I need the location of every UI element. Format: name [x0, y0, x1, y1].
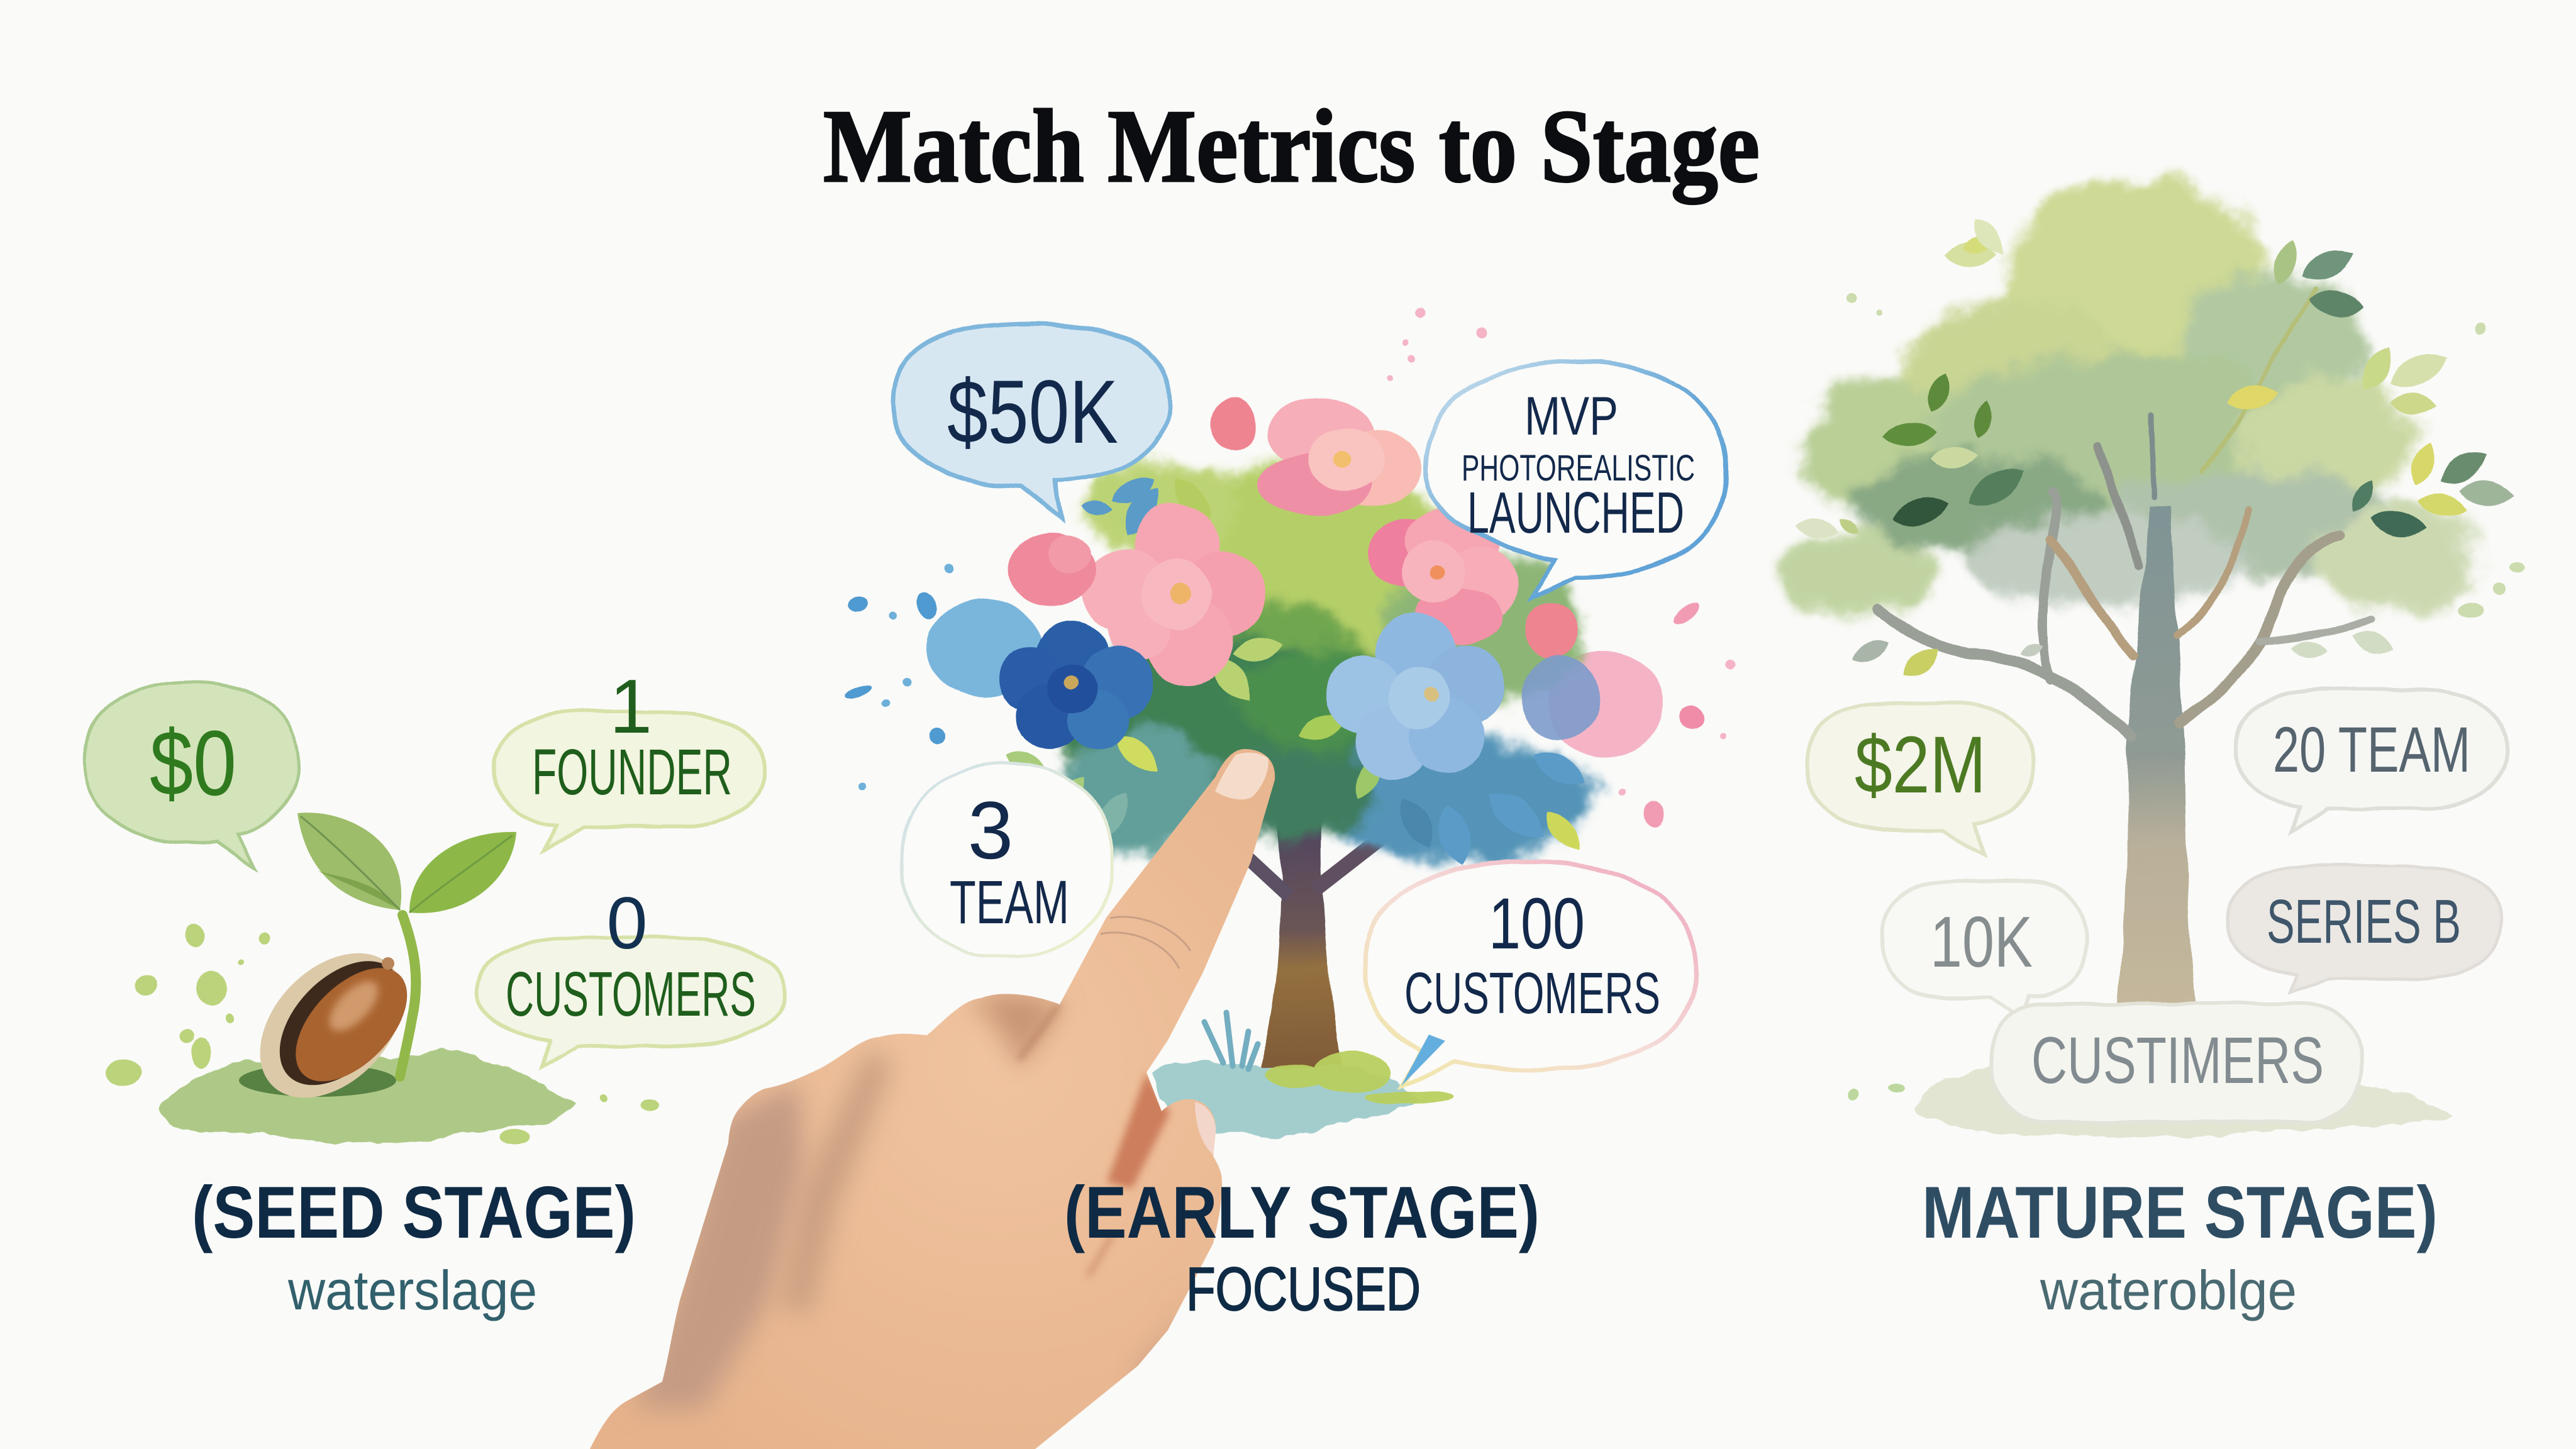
- bubble: 0 customers: CUSTOMERS: [506, 959, 756, 1030]
- ground wash: [1915, 1066, 2453, 1138]
- bubble: MVP launched: LAUNCHED: [1467, 480, 1684, 545]
- paint dots: [1846, 293, 2524, 1100]
- bubble: 20 team: 20 TEAM: [2273, 714, 2470, 786]
- crown foliage: [1057, 462, 1597, 862]
- seed stage caption: waterslage: [287, 1259, 537, 1321]
- blue leaves: [1080, 470, 1590, 870]
- paint splatter: [106, 924, 660, 1145]
- light blue flower: [1326, 613, 1506, 780]
- bubble: $50K: [893, 323, 1170, 519]
- bubble: 3 team: TEAM: [950, 868, 1069, 936]
- stem: [400, 915, 416, 1077]
- ground wash: [159, 1047, 575, 1145]
- panel: seed stage: [84, 663, 785, 1321]
- leaves: [1794, 214, 2516, 684]
- dark blue flower: [1000, 621, 1153, 750]
- thumbnail: [1195, 1102, 1216, 1155]
- icon: pointing hand: [590, 749, 1275, 1449]
- ground wash: [1152, 1062, 1419, 1136]
- bubble: 1 founder: [494, 663, 765, 850]
- tree trunk: [1260, 816, 1341, 1069]
- pink flower top: [1258, 399, 1421, 516]
- panel: early stage: [843, 308, 1735, 1136]
- canopy: [1777, 179, 2478, 616]
- bubble: 0 customers: [477, 882, 785, 1067]
- right branch: [1314, 824, 1399, 890]
- bubble: 10K: [1882, 882, 2087, 1020]
- pink flower right: [1368, 506, 1519, 645]
- bubble: 3 team: [901, 763, 1113, 957]
- blue paint splash: [843, 565, 1042, 790]
- bubble: 1 founder: 1: [609, 663, 652, 749]
- bubble: 3 team: 3: [968, 784, 1013, 876]
- bubble: 10K: 10K: [1930, 902, 2033, 982]
- bubble: 1 founder: FOUNDER: [532, 736, 732, 808]
- bubble: 100 customers: [1365, 862, 1696, 1086]
- bubble: $2M: [1806, 702, 2034, 855]
- bubble: 100 customers: CUSTOMERS: [1404, 960, 1660, 1026]
- bubble: customers: CUSTIMERS: [2031, 1024, 2324, 1097]
- green leaves: [1003, 470, 1588, 857]
- bubble: 0 customers: 0: [606, 882, 648, 964]
- fingernail: [1215, 753, 1269, 799]
- bubble: 100 customers: 100: [1489, 884, 1585, 964]
- early stage label: (EARLY STAGE): [1064, 1171, 1540, 1253]
- mature stage caption: wateroblge: [2040, 1259, 2297, 1321]
- branches: [1877, 289, 2371, 736]
- pink bud right: [1526, 602, 1579, 660]
- seed kernel: [275, 948, 428, 1102]
- trunk: [2118, 506, 2196, 1004]
- bubble: customers: [1991, 1004, 2363, 1123]
- bubble: $0: [84, 682, 299, 867]
- panel: mature stage: [1777, 179, 2524, 1321]
- bubble: $2M: $2M: [1855, 720, 1986, 810]
- lavender flower: [1521, 657, 1599, 740]
- seed husk: [232, 926, 431, 1125]
- illustration: seed and sprout: [106, 813, 660, 1145]
- pink flower left: [1083, 503, 1266, 686]
- bubble: MVP launched: [1425, 362, 1726, 597]
- early stage caption: FOCUSED: [1186, 1255, 1421, 1323]
- grass: [1204, 1013, 1258, 1069]
- bubble: $50K: $50K: [947, 362, 1118, 462]
- soil hole: [239, 1064, 396, 1097]
- left leaf: [297, 813, 401, 910]
- moss at base: [1264, 1051, 1453, 1104]
- pink bud top: [1210, 398, 1255, 451]
- seed tip: [382, 957, 394, 970]
- pink flower small left: [1008, 533, 1096, 606]
- bubble: $0: $0: [150, 712, 236, 815]
- bubble: series B: SERIES B: [2267, 887, 2461, 956]
- seed stage label: (SEED STAGE): [192, 1171, 636, 1253]
- right leaf: [409, 832, 516, 913]
- pink paint splash: [1387, 308, 1735, 827]
- illustration: flowering tree: [843, 308, 1735, 1136]
- mature stage label: MATURE STAGE): [1922, 1171, 2438, 1253]
- bubble: series B: [2228, 866, 2502, 992]
- bubble: 20 team: [2236, 689, 2507, 831]
- bubble: MVP launched: MVP: [1524, 386, 1618, 447]
- left branch: [1248, 858, 1289, 896]
- title: Match Metrics to Stage: [823, 88, 1760, 204]
- illustration: mature tree: [1777, 179, 2524, 1138]
- bubble: MVP launched: PHOTOREALISTIC: [1462, 448, 1695, 489]
